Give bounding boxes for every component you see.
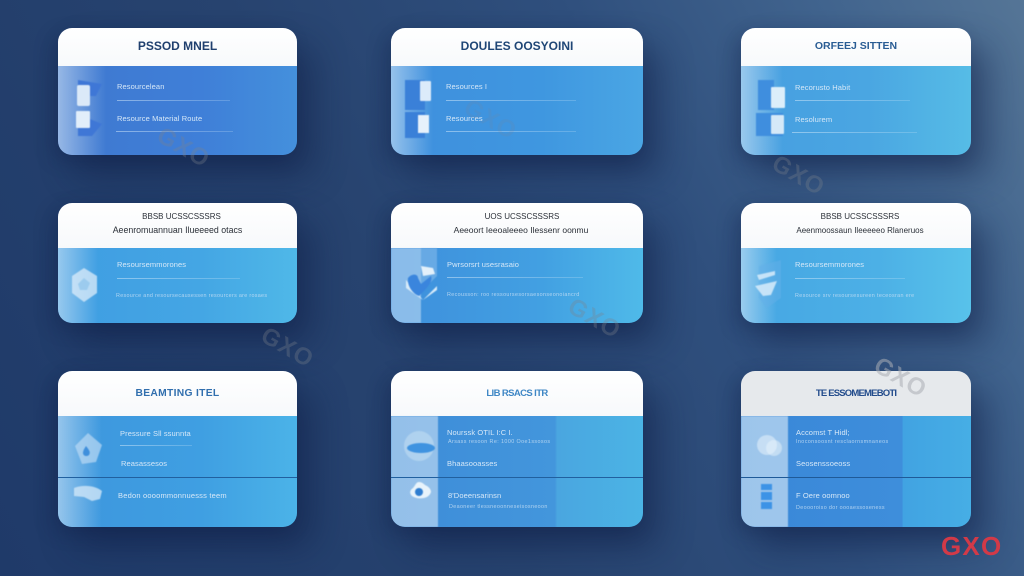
- card: middle left: [58, 203, 297, 323]
- card: bottom left: [58, 371, 297, 527]
- heading: top right: ORFEEJ SITTEN: [815, 40, 897, 52]
- text block: row one: Resources: [446, 114, 483, 123]
- text block: row one: Pwrsorsrt usesrasaio: [447, 260, 519, 269]
- text block: row two: Deoooroiso dor oooaessoseness: [796, 505, 885, 511]
- text block: row one: [446, 82, 576, 132]
- panel body: bottom left: [58, 416, 297, 527]
- text block: row one: Recousson: roo ressoursesorsaesonseonoiancrd: [447, 292, 580, 298]
- text block: row one: [796, 428, 889, 468]
- panel body: top left: [58, 66, 297, 155]
- heading: middle middle: UOS UCSSCSSSRS: [485, 212, 559, 221]
- panel body: middle right: [741, 248, 971, 323]
- panel body: bottom right: [741, 416, 971, 527]
- watermark: GXO on middle center card: GXO: [563, 293, 626, 344]
- text block: row one: Resolurem: [795, 115, 832, 124]
- text block: row two: [448, 491, 548, 510]
- panel body: bottom middle: [391, 416, 643, 527]
- text block: row one: [792, 83, 917, 133]
- text block: row one: Bhaasooasses: [447, 459, 497, 468]
- heading: bottom left: [58, 371, 297, 416]
- text block: row one: Arsass resoon Re: 1000 Ooe1ssosos: [448, 439, 550, 445]
- heading: middle right: [741, 203, 971, 248]
- heading: middle middle: [391, 203, 643, 248]
- divider: [58, 477, 297, 478]
- heading: middle middle: Aeeoort Ieeoaleeeo Ilessenr oonmu: [454, 225, 588, 235]
- text block: row one: [447, 260, 583, 298]
- heading: top middle: [391, 28, 643, 66]
- text block: row one: Accomst T Hidl;: [796, 428, 850, 437]
- card: middle middle: [391, 203, 643, 323]
- text block: row one: Resourcelean: [117, 82, 164, 91]
- text block: row one: [116, 260, 267, 299]
- heading: bottom right: [741, 371, 971, 416]
- panel body: middle middle: [391, 248, 643, 323]
- panel body: middle left: [58, 248, 297, 323]
- text block: row one: [120, 429, 192, 468]
- heading: top left: PSSOD MNEL: [138, 39, 217, 53]
- icon: pale shield: [755, 260, 781, 302]
- text block: row one: [447, 428, 550, 468]
- card: bottom middle: [391, 371, 643, 527]
- panel body: top right: [741, 66, 971, 155]
- text block: row one: Inoconsoosnt resclaornsmnaneos: [796, 439, 889, 445]
- text block: row one: Reasassesos: [121, 459, 167, 468]
- text block: row one: Resource Material Route: [117, 114, 202, 123]
- text block: row two: [796, 491, 885, 511]
- divider: [741, 477, 971, 478]
- logo: red GXO: GXO: [941, 531, 1002, 561]
- text block: row one: [795, 260, 915, 299]
- heading: middle left: BBSB UCSSCSSSRS: [142, 212, 221, 221]
- icon strip: [74, 432, 102, 502]
- icon: stacked documents: [404, 80, 432, 138]
- text block: row two: 8'Doeensarinsn: [448, 491, 501, 500]
- text block: row one: Seosenssoeoss: [796, 459, 850, 468]
- heading: bottom middle: [391, 371, 643, 416]
- watermark: GXO below middle left card: GXO: [256, 322, 319, 373]
- text block: row one: Resources I: [446, 82, 487, 91]
- text block: row one: Resource and resoursecausessen resourcers are rosaes: [116, 293, 267, 299]
- heading: top right: [741, 28, 971, 66]
- text block: row one: Nourssk OTIL I:C I.: [447, 428, 513, 437]
- text block: row one: Resoursemmorones: [795, 260, 864, 269]
- icon: blue check shield: [391, 248, 438, 323]
- card: bottom right: [741, 371, 971, 527]
- heading: top middle: DOULES OOSYOINI: [461, 39, 573, 53]
- icon: stacked boxes: [756, 80, 786, 136]
- divider: [391, 477, 643, 478]
- text block: row one: Pressure Sll ssunnta: [120, 429, 191, 438]
- card: middle right: [741, 203, 971, 323]
- heading: bottom right: TE ESSOMEMEBOTI: [816, 388, 896, 399]
- text block: row one: [116, 82, 233, 132]
- text block: row one: Recorusto Habit: [795, 83, 850, 92]
- icon strip: [741, 416, 788, 527]
- heading: middle left: Aeenromuannuan Ilueeeed otacs: [113, 225, 242, 235]
- watermark: GXO near top left card: GXO: [152, 122, 215, 173]
- icon: stacked blue boxes: [75, 80, 101, 136]
- text block: row one: Resoursemmorones: [117, 260, 186, 269]
- card: top left: [58, 28, 297, 155]
- heading: middle right: BBSB UCSSCSSSRS: [821, 212, 899, 221]
- text block: row two: Bedon oooommonnuesss teem: [118, 491, 227, 500]
- watermark: GXO above bottom right card: GXO: [869, 352, 932, 403]
- heading: top left: [58, 28, 297, 66]
- heading: middle right: Aeenmoossaun Ileeeeeo Rlaneruos: [796, 226, 924, 235]
- icon: hexagon shield: [72, 268, 98, 302]
- icon strip: [391, 416, 438, 527]
- text block: row one: Resource srv resoursesureen teceosran ere: [795, 293, 915, 299]
- watermark: GXO on top middle card: GXO: [459, 94, 522, 145]
- card: top middle: [391, 28, 643, 155]
- panel body: top middle: [391, 66, 643, 155]
- heading: bottom left: BEAMTING ITEL: [136, 388, 219, 399]
- text block: row two: F Oere oomnoo: [796, 491, 850, 500]
- card: top right: [741, 28, 971, 155]
- heading: bottom middle: LIB RSACS ITR: [486, 388, 548, 399]
- text block: row two: Deaoneer tlessneoonneseisosneoon: [449, 504, 548, 510]
- heading: middle left: [58, 203, 297, 248]
- watermark: GXO below top right card: GXO: [767, 150, 830, 201]
